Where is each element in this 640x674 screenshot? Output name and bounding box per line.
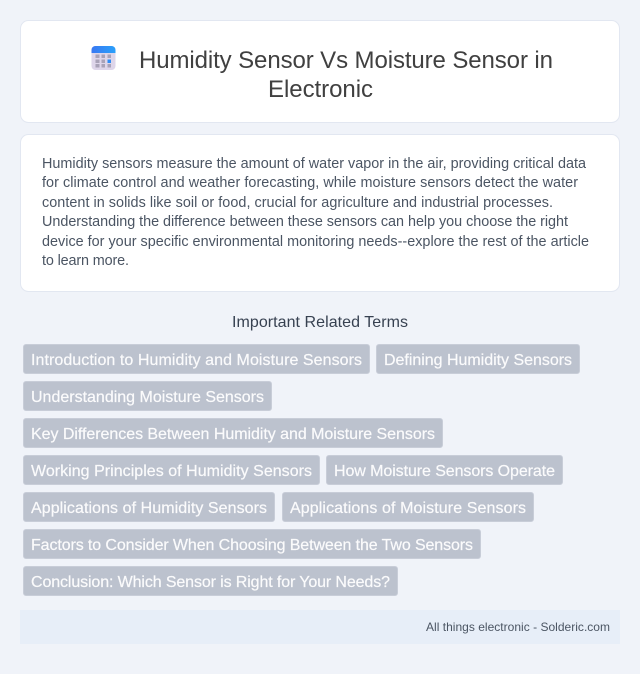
tag: factors to consider: Factors to Consider When Choosing Between the Two Sensors: [31, 537, 473, 554]
footer: [20, 610, 620, 644]
tag: applications of moisture sensors: Applications of Moisture Sensors: [290, 500, 526, 517]
tag: applications of humidity sensors: [24, 492, 274, 522]
tag: key differences: [24, 418, 442, 448]
icon: calendar: [92, 46, 116, 70]
tag: working principles: Working Principles of Humidity Sensors: [31, 463, 312, 480]
tag: key differences: Key Differences Between Humidity and Moisture Sensors: [31, 426, 435, 443]
tag: how moisture sensors operate: How Moisture Sensors Operate: [334, 463, 555, 480]
tag: understanding moisture sensors: [24, 382, 272, 410]
panel: intro text: [20, 134, 620, 292]
text block: intro paragraph: device for your specific environmental monitoring needs--explore the rest of the article: [42, 234, 589, 250]
tag: working principles: [24, 456, 320, 484]
tag: conclusion: Conclusion: Which Sensor is Right for Your Needs?: [31, 574, 390, 591]
footer credit: All things electronic - Solderic.com: [426, 620, 610, 634]
panel: related term tags: [24, 344, 580, 596]
heading: title: Electronic: [268, 76, 373, 103]
tag: how moisture sensors operate: [326, 456, 562, 484]
text block: intro paragraph: Understanding the difference between these sensors can help you choose the right: [42, 214, 568, 230]
tag: applications of humidity sensors: Applications of Humidity Sensors: [31, 500, 267, 517]
text block: intro paragraph: to learn more.: [42, 253, 129, 269]
heading: title: Humidity Sensor Vs Moisture Sensor in: [139, 47, 553, 74]
tag: applications of moisture sensors: [282, 492, 534, 522]
tag: conclusion: [24, 566, 398, 596]
tag: understanding moisture sensors: Understanding Moisture Sensors: [31, 389, 264, 406]
text block: intro paragraph: content in solids like soil or food, crucial for agriculture and industrial processes.: [42, 195, 553, 211]
panel: title: [20, 20, 620, 122]
tag: defining humidity sensors: [376, 344, 580, 374]
tag: introduction: Introduction to Humidity and Moisture Sensors: [31, 352, 362, 369]
tag: defining humidity sensors: Defining Humidity Sensors: [384, 352, 572, 369]
text block: intro paragraph: for climate control and weather forecasting, while moisture sensors detect the water: [42, 175, 578, 191]
text block: intro paragraph: Humidity sensors measure the amount of water vapor in the air, providing critical data: [42, 156, 586, 172]
tag: factors to consider: [24, 530, 480, 558]
tag: introduction: [24, 344, 370, 374]
heading: related terms: Important Related Terms: [232, 314, 408, 331]
